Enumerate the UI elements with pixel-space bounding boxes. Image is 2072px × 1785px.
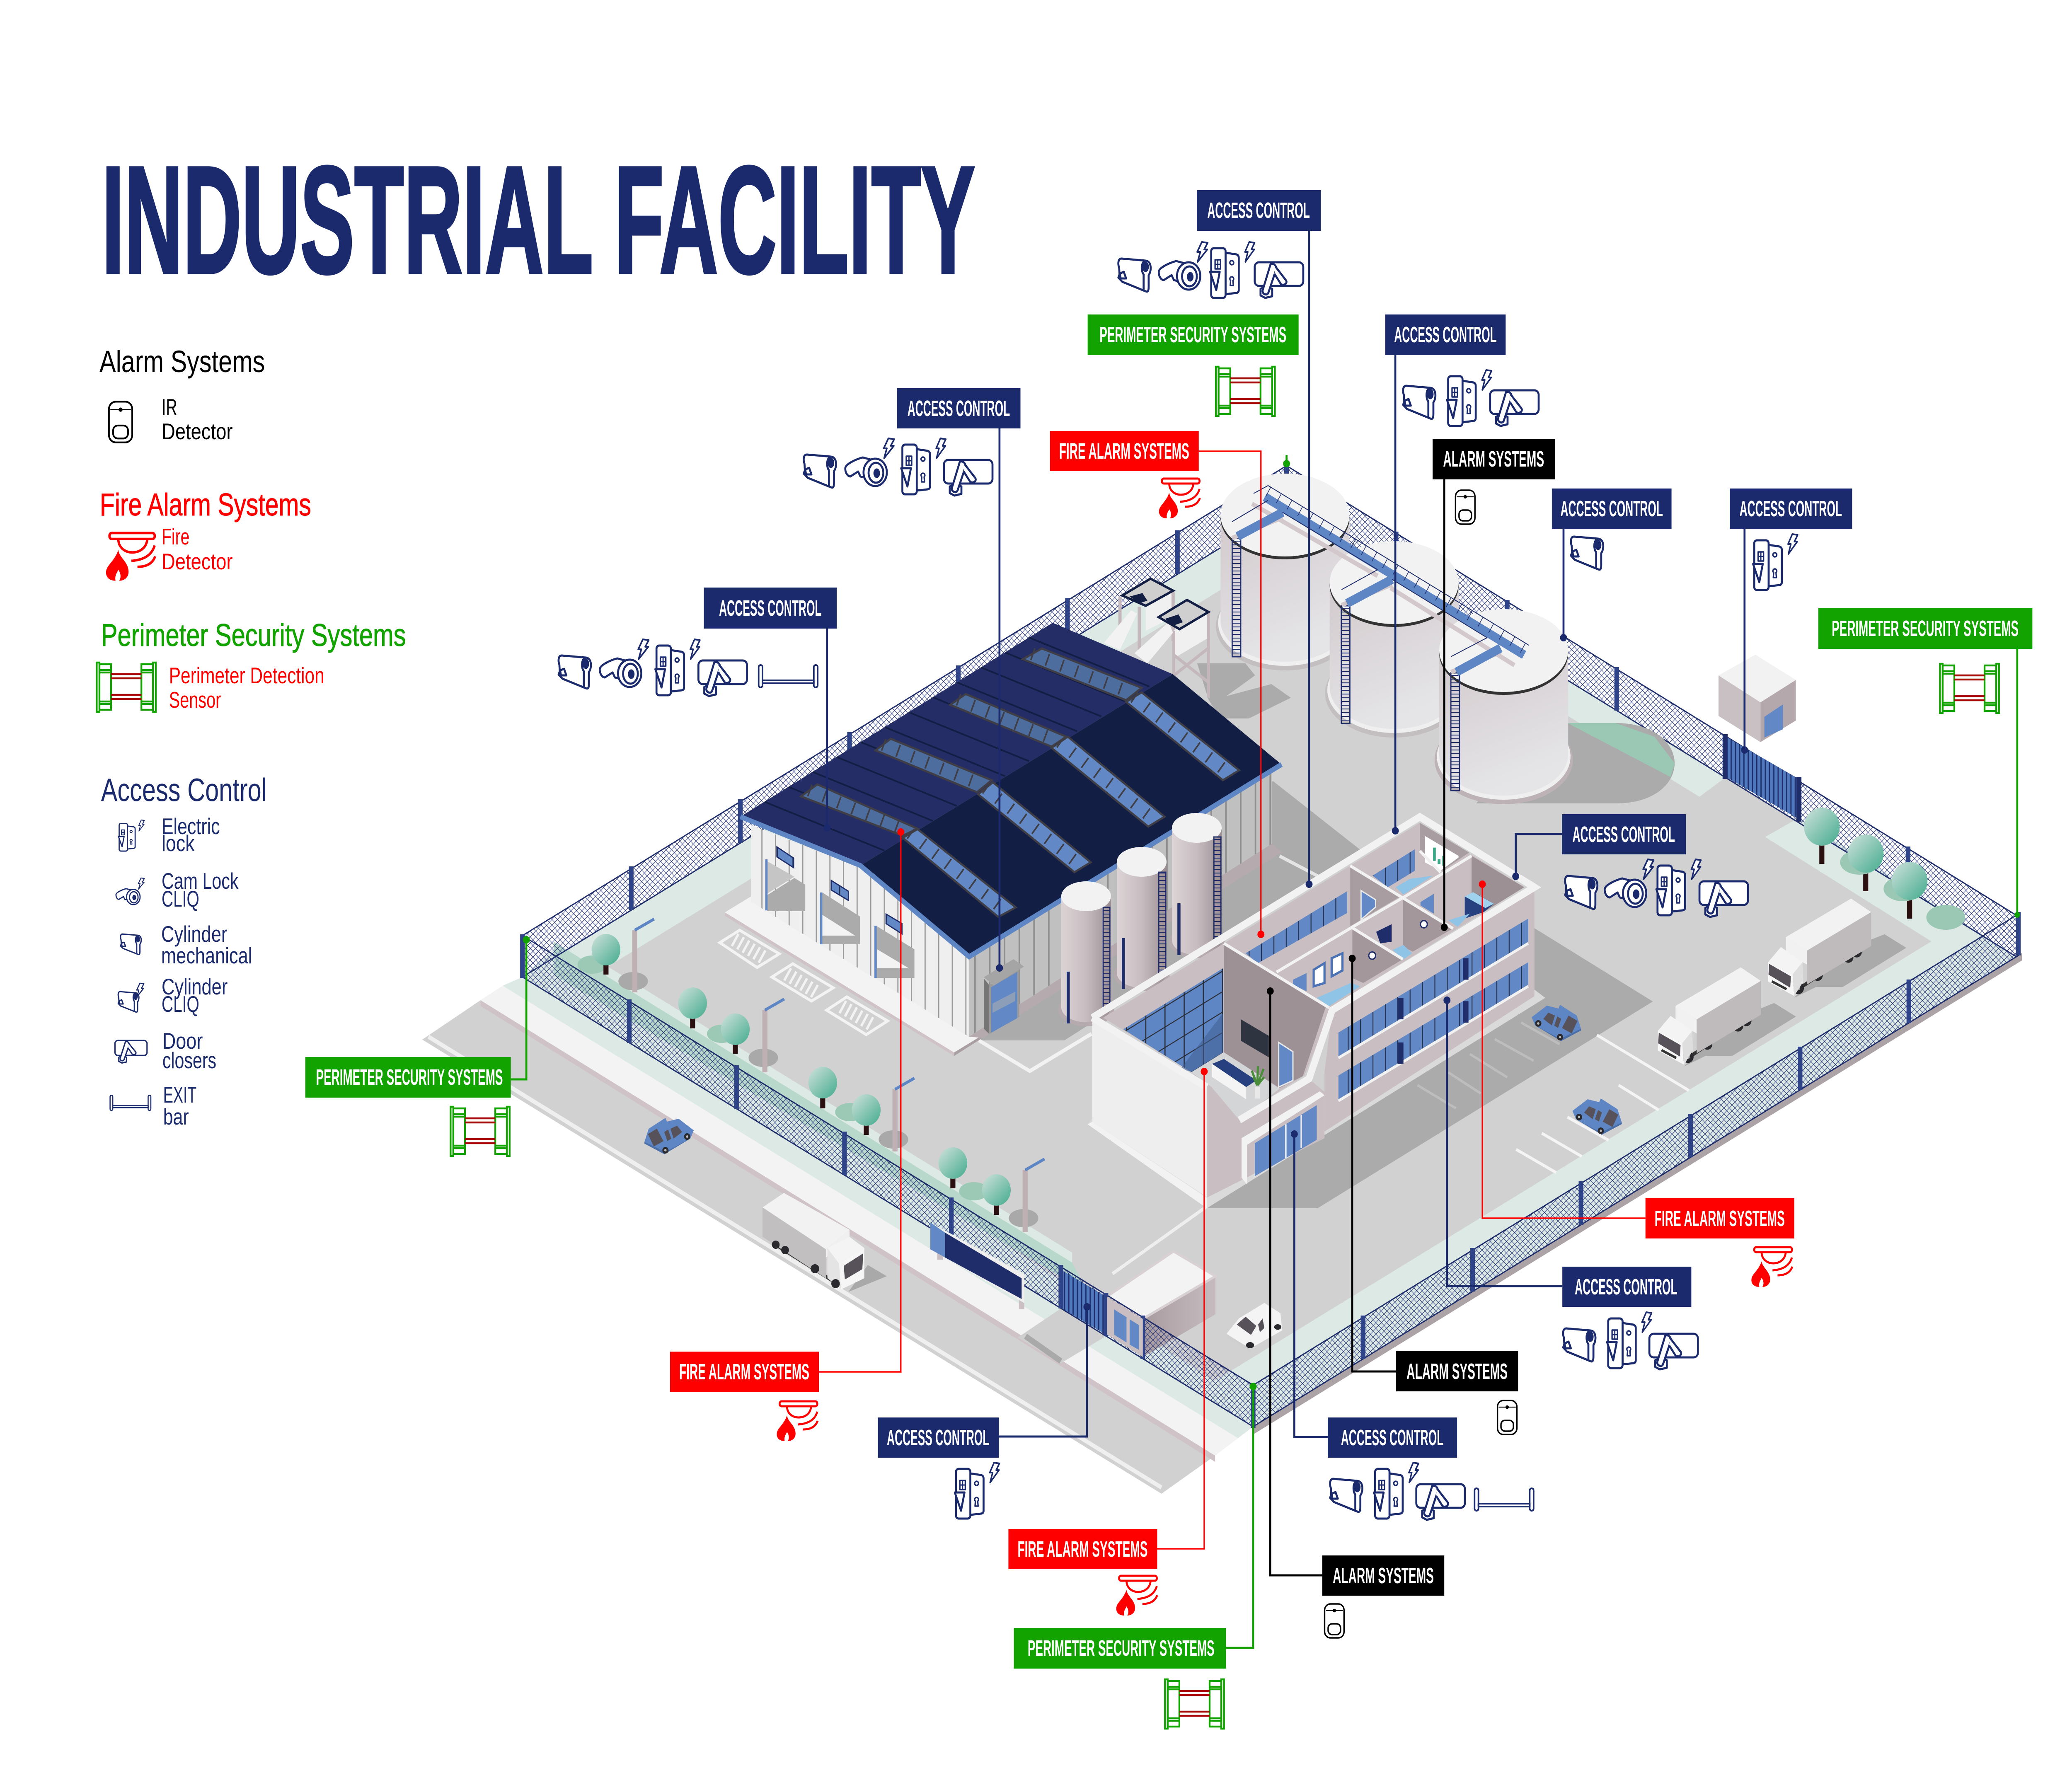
storage tank 3 xyxy=(1435,609,1573,804)
callout: access control warehouse roof xyxy=(559,588,837,696)
hatched pads xyxy=(720,930,888,1035)
tank walkway xyxy=(1232,486,1529,672)
legend: access control: Access Control xyxy=(101,772,267,808)
silos xyxy=(1058,813,1225,1026)
callout: access control top xyxy=(1118,190,1321,298)
callout: perimeter security bottom xyxy=(1014,1628,1226,1729)
legend: access control: mechanical xyxy=(161,943,252,968)
callout: alarm lower right xyxy=(1396,1351,1518,1434)
callout: perimeter security top: PERIMETER SECURITY SYSTEMS xyxy=(1099,323,1286,347)
office entrance xyxy=(1242,1091,1324,1185)
callout: perimeter security left xyxy=(305,1057,511,1156)
trucks xyxy=(762,899,1906,1292)
lobby xyxy=(1123,943,1326,1120)
warehouse door xyxy=(984,959,1024,1034)
callout: access control tank xyxy=(1552,489,1672,570)
callout: fire alarm lower: FIRE ALARM SYSTEMS xyxy=(1017,1537,1147,1562)
green verges xyxy=(523,507,2018,1427)
guard house top right xyxy=(1719,655,1796,742)
legend: alarm systems: Alarm Systems xyxy=(99,345,265,379)
legend: fire alarm systems xyxy=(100,487,311,581)
legend: fire alarm systems: Fire Alarm Systems xyxy=(100,487,311,522)
legend: perimeter security systems: Perimeter Security Systems xyxy=(101,617,406,653)
office exterior walls xyxy=(1207,887,1535,1197)
storage tank 2 xyxy=(1325,541,1463,738)
leader end dots xyxy=(523,460,2020,1390)
legend: access control: CLIQ xyxy=(162,992,199,1017)
perimeter trees and lamps xyxy=(578,808,1965,1232)
office window rows xyxy=(1339,919,1528,1101)
legend: access control: closers xyxy=(162,1048,216,1073)
legend: access control: Electric xyxy=(162,814,220,839)
warehouse xyxy=(725,623,1282,1056)
sign board xyxy=(930,1222,1024,1309)
callout: access control gatehouse: ACCESS CONTROL xyxy=(887,1426,990,1450)
legend: access control: Cam Lock xyxy=(162,869,239,894)
callout: alarm lower right: ALARM SYSTEMS xyxy=(1406,1359,1508,1384)
callout: access control office: ACCESS CONTROL xyxy=(1573,822,1675,847)
legend: access control: Cylinder xyxy=(162,975,228,999)
rear fences xyxy=(523,463,2019,977)
callout: access control warehouse door: ACCESS CONTROL xyxy=(908,397,1010,421)
legend: alarm systems xyxy=(99,345,265,444)
cars xyxy=(644,1005,1622,1353)
ground shadows and markings xyxy=(969,663,1689,1274)
legend: fire alarm systems: Detector xyxy=(162,549,232,574)
callout: access control tank: ACCESS CONTROL xyxy=(1560,497,1663,521)
callout: perimeter security right xyxy=(1818,608,2032,713)
callout: access control upper xyxy=(1385,314,1539,426)
office rim walls xyxy=(1092,817,1535,1120)
legend: alarm systems: Detector xyxy=(162,419,232,444)
legend: access control: Door xyxy=(162,1029,203,1054)
legend: access control: EXIT xyxy=(163,1083,196,1108)
callout: fire alarm lower left xyxy=(670,1352,819,1441)
callout: access control office xyxy=(1562,814,1748,917)
legend: perimeter security systems: Perimeter Detection xyxy=(169,663,324,688)
callout: fire alarm top: FIRE ALARM SYSTEMS xyxy=(1059,439,1189,464)
storage tank 1 xyxy=(1216,474,1354,670)
warehouse walls xyxy=(751,772,1282,1038)
isometric facility illustration xyxy=(422,463,2022,1494)
callout: access control lower xyxy=(1328,1417,1534,1520)
callout: fire alarm top xyxy=(1050,431,1200,518)
callout: alarm bottom: ALARM SYSTEMS xyxy=(1333,1564,1434,1588)
legend: access control: lock xyxy=(162,831,195,856)
callout: access control warehouse door xyxy=(804,388,1021,496)
legend: fire alarm systems: Fire xyxy=(162,525,189,549)
callout: access control top: ACCESS CONTROL xyxy=(1207,198,1310,223)
callout: access control upper: ACCESS CONTROL xyxy=(1394,323,1497,347)
callout: fire alarm lower left: FIRE ALARM SYSTEMS xyxy=(679,1360,809,1384)
callout: alarm bottom xyxy=(1322,1555,1444,1638)
callout: perimeter security top xyxy=(1088,314,1299,416)
legend: access control: Cylinder xyxy=(161,922,227,947)
callout: alarm top xyxy=(1433,439,1555,524)
callout: access control gate xyxy=(1730,489,1852,590)
warehouse roof xyxy=(741,623,1281,957)
callout: perimeter security left: PERIMETER SECURITY SYSTEMS xyxy=(316,1065,503,1090)
legend: perimeter security systems: Sensor xyxy=(169,688,221,713)
callout: fire alarm right: FIRE ALARM SYSTEMS xyxy=(1655,1207,1785,1231)
corridor and rooms xyxy=(1246,823,1524,1006)
office building xyxy=(1088,817,1545,1208)
callout: access control lower right: ACCESS CONTROL xyxy=(1575,1275,1677,1299)
legend: perimeter security systems xyxy=(97,617,406,713)
callout: access control lower: ACCESS CONTROL xyxy=(1341,1426,1443,1450)
guard house front face at gate xyxy=(1107,1296,1143,1357)
callout: access control lower right xyxy=(1562,1267,1698,1369)
legend: alarm systems: IR xyxy=(162,395,177,420)
legend: access control: bar xyxy=(163,1105,189,1130)
callout: fire alarm right xyxy=(1646,1198,1794,1287)
callout: perimeter security bottom: PERIMETER SECURITY SYSTEMS xyxy=(1028,1636,1215,1661)
hoppers xyxy=(1104,579,1208,698)
site ground xyxy=(523,507,2018,1427)
callout: fire alarm lower xyxy=(1008,1529,1157,1616)
callout: access control warehouse roof: ACCESS CONTROL xyxy=(719,596,822,621)
sliding gate rear xyxy=(1725,734,1799,822)
guard house right face and roof at gate xyxy=(1107,1251,1215,1357)
callout: access control gate: ACCESS CONTROL xyxy=(1740,497,1842,521)
callout: access control gatehouse xyxy=(878,1417,1000,1519)
title: INDUSTRIAL FACILITY xyxy=(102,135,975,305)
legend: access control: CLIQ xyxy=(162,887,199,912)
callout: alarm top: ALARM SYSTEMS xyxy=(1443,447,1544,472)
legend: access control xyxy=(101,772,267,1130)
warehouse platform xyxy=(725,897,989,1056)
front fences xyxy=(523,912,2022,1434)
roof skylights xyxy=(801,648,1239,917)
road and sidewalk xyxy=(422,977,1253,1494)
leader lines xyxy=(511,231,2017,1648)
